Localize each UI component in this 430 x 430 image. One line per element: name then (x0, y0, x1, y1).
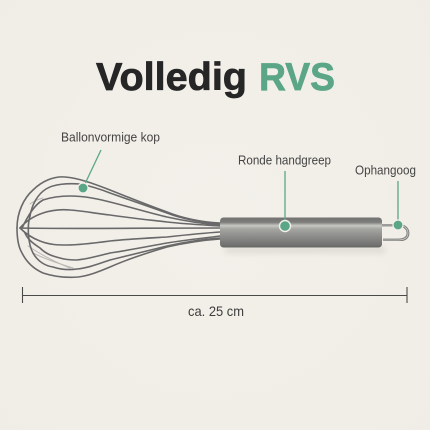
dimension line (22, 287, 407, 303)
hanging eye (382, 225, 408, 240)
callout: Ballonvormige kop (61, 130, 160, 193)
whisk (17, 177, 408, 277)
dimension label: ca. 25 cm (188, 303, 244, 319)
callout: Ronde handgreep (238, 152, 331, 232)
callout: Ophangoog (355, 162, 416, 230)
title: Volledig (96, 56, 247, 99)
callout: Ronde handgreep: Ronde handgreep (238, 152, 331, 168)
handle (220, 218, 382, 248)
whisk head wires (17, 177, 220, 277)
title (96, 56, 335, 99)
title: RVS (259, 56, 335, 99)
handle shadow (225, 247, 385, 253)
callout: Ophangoog: Ophangoog (355, 162, 416, 178)
callout: Ballonvormige kop: Ballonvormige kop (61, 130, 160, 144)
